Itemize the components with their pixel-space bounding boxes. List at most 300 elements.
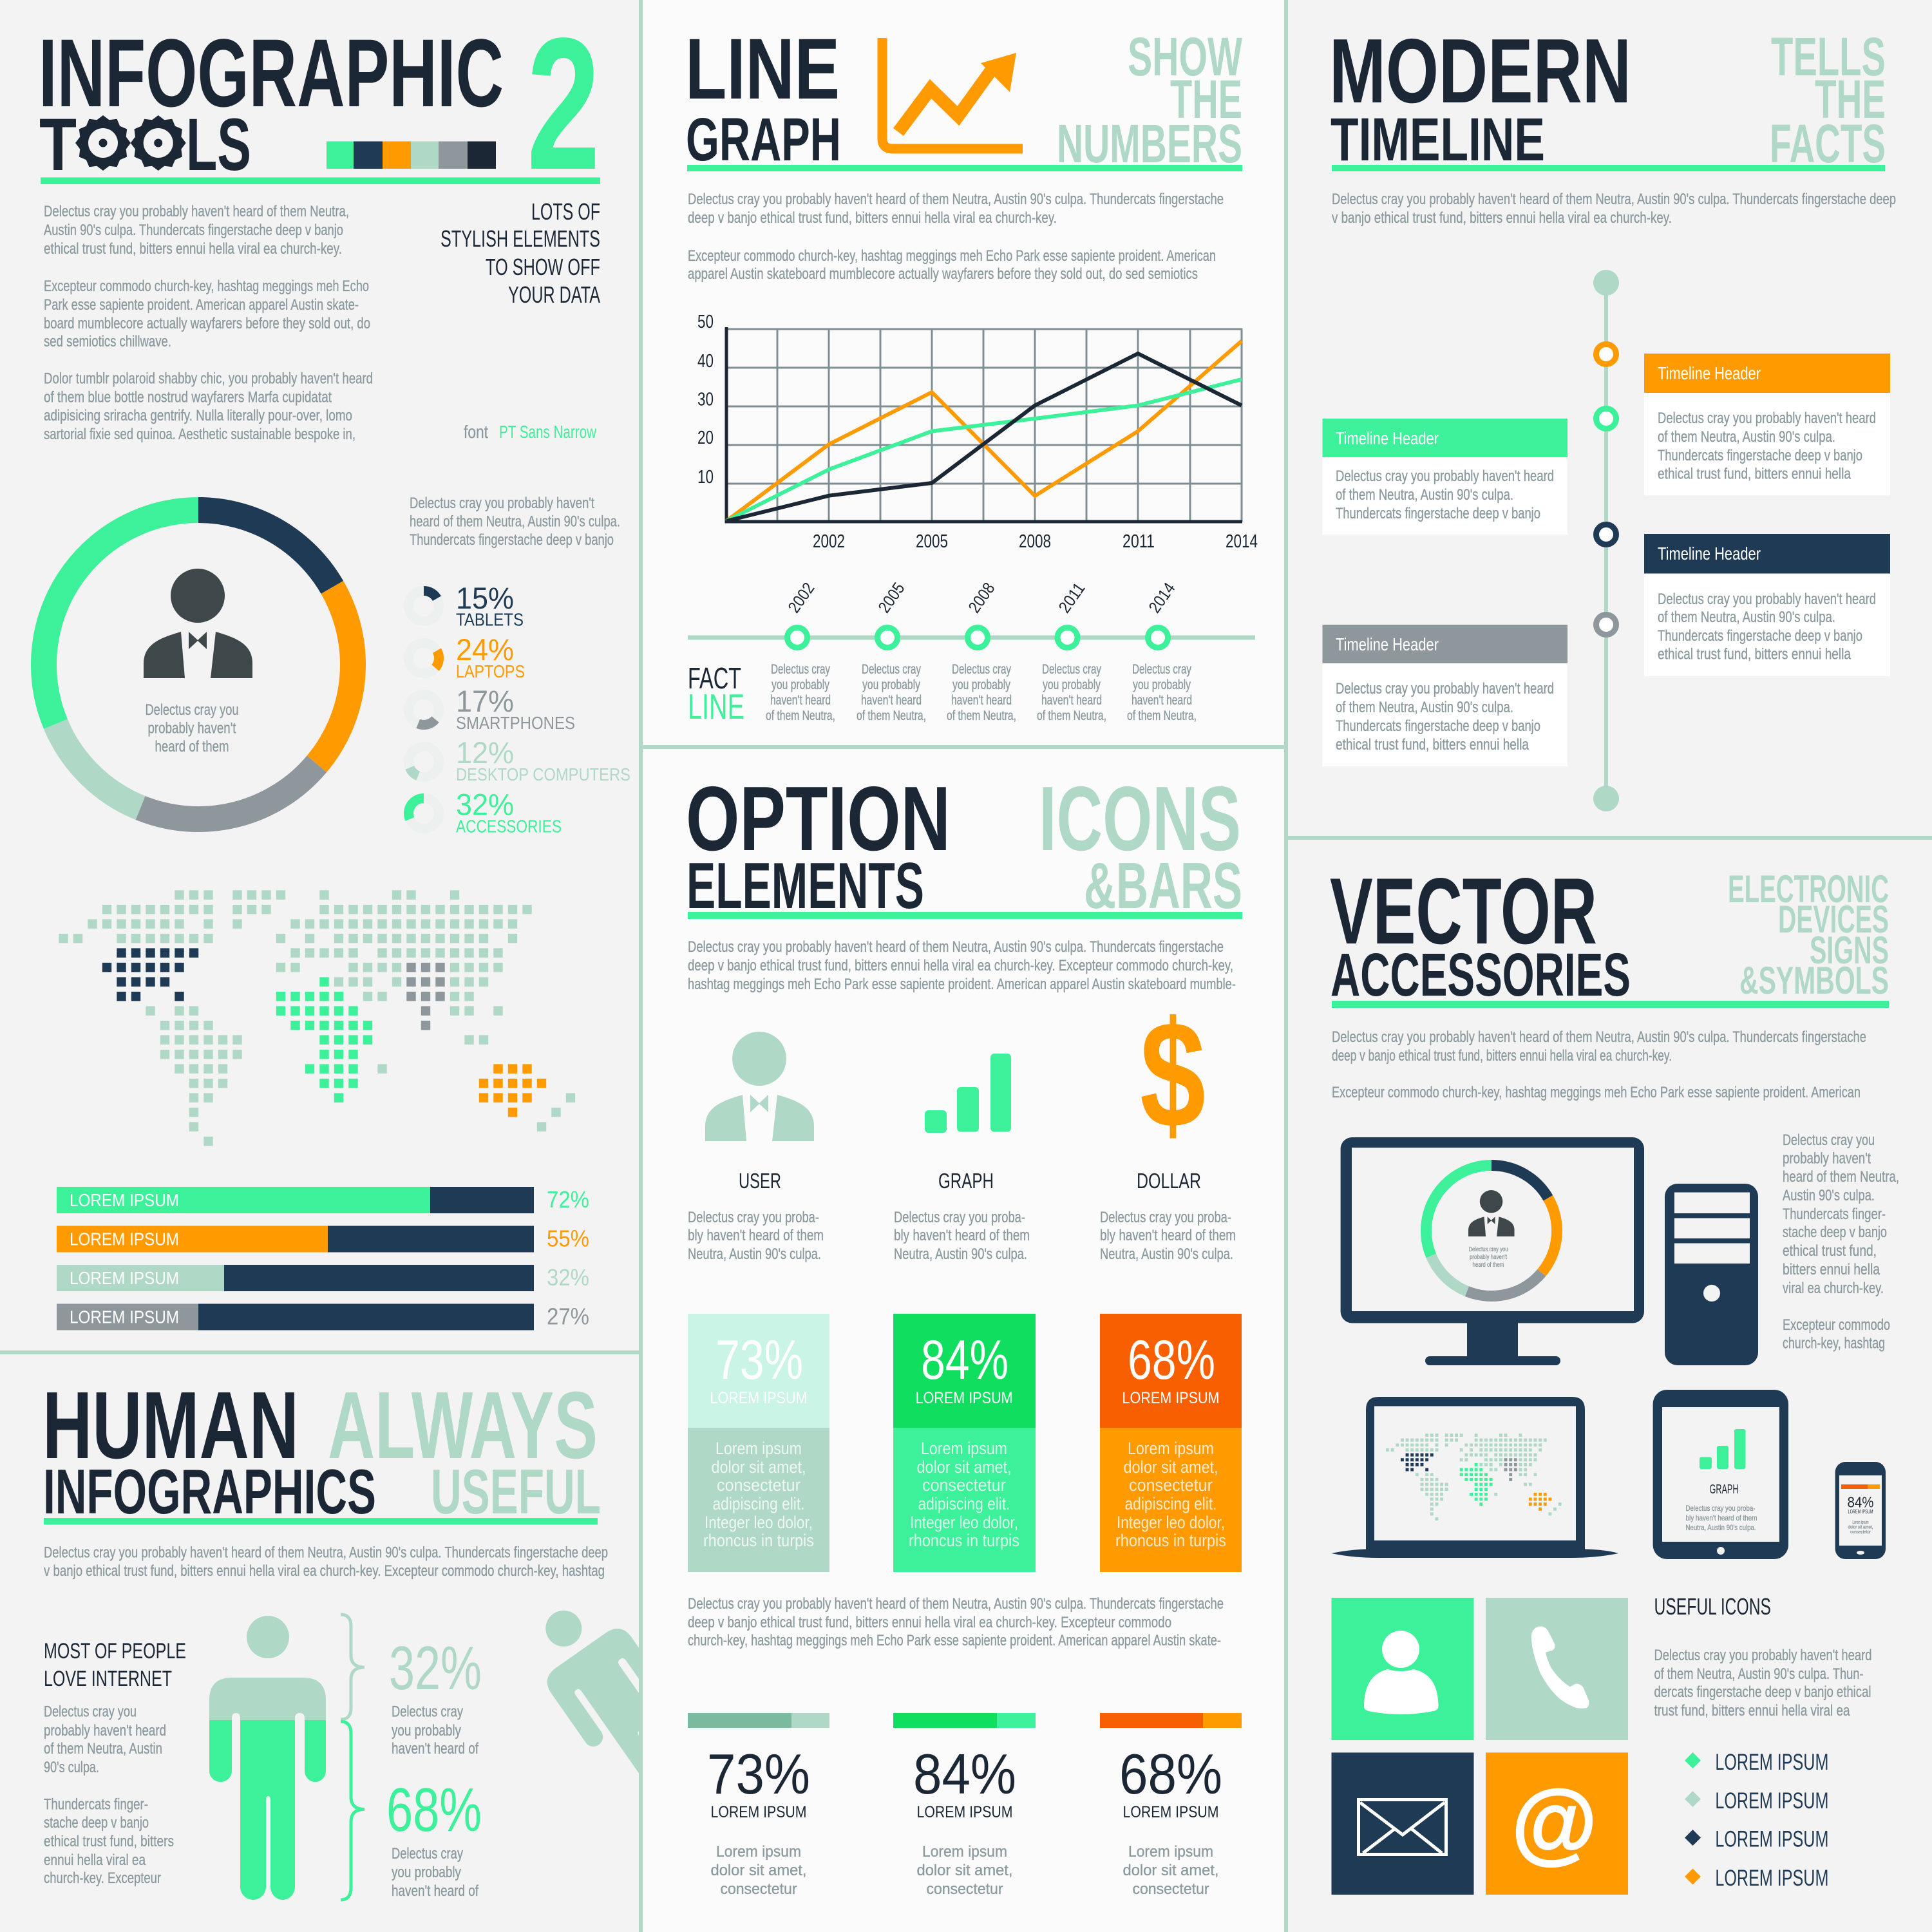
intro text: Delectus cray you probably haven't heard of them Neutra, — [44, 203, 349, 220]
title: infographic tools — [39, 19, 504, 186]
donut caption: probably haven't — [148, 720, 236, 737]
option card: 68%: LOREM IPSUM — [1122, 1389, 1220, 1407]
title: line graph: LINE — [685, 21, 840, 117]
useful icons text: trust fund, bitters ennui hella viral ea — [1654, 1702, 1850, 1719]
icon: computer tower — [1665, 1184, 1758, 1365]
slogan: show the numbers: THE — [1170, 69, 1242, 129]
intro text: Park esse sapiente proident. American apparel Austin skate- — [44, 296, 359, 314]
chart x axis labels: 2014 — [1226, 531, 1258, 552]
bar: 72%: 72% — [547, 1186, 589, 1213]
stat column: 68%: dolor sit amet, — [1123, 1862, 1218, 1879]
fact line captions: Delectus cray — [862, 662, 921, 677]
stat: 32%: Delectus cray — [392, 1703, 463, 1721]
slogan: show the numbers — [1057, 26, 1242, 174]
fact line captions: of them Neutra, — [947, 708, 1016, 723]
useful icons heading: USEFUL ICONS — [1654, 1593, 1771, 1620]
intro text: Austin 90's culpa. Thundercats fingerstache deep v banjo — [44, 222, 343, 239]
timeline card: orange — [1644, 354, 1890, 495]
stat: 68%: haven't heard of — [392, 1882, 478, 1900]
chart y axis labels: 40 — [697, 351, 714, 372]
timeline card: grey: of them Neutra, Austin 90's culpa. — [1336, 699, 1513, 716]
fact line captions: you probably — [862, 677, 920, 692]
bullet list: LOREM IPSUM — [1715, 1866, 1828, 1891]
devices side text — [1783, 1132, 1899, 1352]
icon: gear letters — [75, 115, 186, 171]
bar: 55% — [57, 1225, 589, 1252]
icon labels: GRAPH — [938, 1169, 994, 1193]
tablet screen text: GRAPH — [1709, 1482, 1739, 1497]
fact line captions: haven't heard — [951, 693, 1012, 708]
tilted human figure — [545, 1610, 639, 1774]
fact line captions: Delectus cray — [952, 662, 1011, 677]
colour palette swatches — [327, 142, 496, 169]
stat: 68%: Delectus cray — [392, 1845, 463, 1862]
legend: desktop computers: DESKTOP COMPUTERS — [456, 764, 630, 784]
fact line captions: haven't heard — [1041, 693, 1102, 708]
icon: smartphone: dolor sit amet, — [1848, 1526, 1873, 1530]
option card: 84%: dolor sit amet, — [917, 1457, 1011, 1477]
stat column: 73%: dolor sit amet, — [711, 1862, 806, 1879]
fact line captions: Delectus cray — [771, 662, 830, 677]
monitor screen donut — [1426, 1165, 1557, 1296]
devices side text: Delectus cray you — [1783, 1132, 1875, 1149]
legend: laptops: 24% — [456, 632, 514, 667]
title: option elements: &BARS — [1084, 850, 1242, 922]
fact line captions: of them Neutra, — [1127, 708, 1197, 723]
side heading: STYLISH ELEMENTS — [440, 225, 600, 252]
icon descriptions: Delectus cray you proba- — [894, 1209, 1025, 1226]
tablet screen text — [1686, 1482, 1757, 1532]
intro text: Delectus cray you probably haven't heard of them Neutra, Austin 90's culpa. Thundercats fingerstache deep — [44, 1544, 608, 1562]
icon: graph — [925, 1054, 1011, 1133]
fact line captions: you probably — [1133, 677, 1191, 692]
devices side text: bitters ennui hella — [1783, 1261, 1880, 1278]
timeline card: orange: of them Neutra, Austin 90's culpa. — [1658, 428, 1835, 446]
icon labels: USER — [739, 1169, 781, 1193]
lower body text: Delectus cray you probably haven't heard of them Neutra, Austin 90's culpa. Thundercats fingerstache — [688, 1595, 1224, 1613]
fact line markers — [787, 627, 1168, 648]
monitor screen caption: heard of them — [1472, 1262, 1504, 1269]
option card: 84%: consectetur — [922, 1475, 1006, 1495]
option card: 68%: consectetur — [1129, 1475, 1213, 1495]
tablet screen graph — [1700, 1429, 1745, 1469]
bar: 55%: 55% — [547, 1225, 589, 1252]
monitor screen caption: probably haven't — [1470, 1254, 1507, 1261]
timeline card: green: Delectus cray you probably haven't heard — [1336, 468, 1554, 485]
fact line years: 2014 — [1144, 579, 1179, 616]
chart y axis labels — [697, 312, 714, 488]
timeline card: navy — [1644, 534, 1890, 676]
heading rule — [688, 912, 1242, 919]
devices side text: heard of them Neutra, — [1783, 1168, 1899, 1186]
icon tile: at sign: @ — [1511, 1771, 1597, 1872]
option card: 73%: rhoncus in turpis — [703, 1531, 814, 1550]
stat: 32%: haven't heard of — [392, 1740, 478, 1757]
brace: 32% — [341, 1615, 365, 1719]
timeline card: navy: Thundercats fingerstache deep v banjo — [1658, 627, 1862, 645]
bar: 72% — [57, 1186, 589, 1213]
devices side text: ethical trust fund, — [1783, 1242, 1877, 1260]
legend: accessories — [408, 787, 562, 836]
option card: 73%: Integer leo dolor, — [705, 1513, 813, 1532]
legend: tablets: TABLETS — [456, 609, 524, 630]
useful icons text: dercats fingerstache deep v banjo ethical — [1654, 1683, 1871, 1701]
option card: 68%: Integer leo dolor, — [1117, 1513, 1225, 1532]
option card: 73%: adipiscing elit. — [712, 1494, 805, 1513]
left body text — [44, 1703, 174, 1887]
intro text — [44, 1544, 608, 1580]
bar: 72%: LOREM IPSUM — [70, 1190, 179, 1210]
option card: 84%: LOREM IPSUM — [916, 1389, 1012, 1407]
icon: user — [705, 1032, 814, 1141]
icon: smartphone — [1835, 1462, 1886, 1559]
fact line heading: FACT — [688, 661, 741, 695]
timeline card: grey: Delectus cray you probably haven't heard — [1336, 680, 1554, 697]
legend: accessories: ACCESSORIES — [456, 816, 562, 836]
stat column: 68%: consectetur — [1132, 1880, 1209, 1898]
fact line — [688, 579, 1255, 726]
fact line years: 2011 — [1054, 579, 1089, 616]
stat column: 68%: LOREM IPSUM — [1123, 1803, 1218, 1821]
legend: laptops — [408, 632, 525, 681]
title: modern timeline — [1329, 20, 1631, 174]
donut caption: heard of them — [155, 738, 229, 755]
title: line graph — [685, 21, 841, 174]
icon labels: DOLLAR — [1137, 1169, 1201, 1193]
bullet list: LOREM IPSUM — [1715, 1750, 1828, 1775]
title: modern timeline: MODERN — [1329, 20, 1631, 122]
monitor screen caption — [1468, 1246, 1508, 1269]
option card: 84%: Integer leo dolor, — [910, 1513, 1018, 1532]
monitor screen caption: Delectus cray you — [1468, 1246, 1508, 1253]
timeline card: green — [1323, 419, 1567, 535]
fact line heading: LINE — [688, 687, 744, 726]
option card: 73%: 73% — [715, 1329, 803, 1391]
stat column: 84%: dolor sit amet, — [917, 1862, 1012, 1879]
left body text: of them Neutra, Austin — [44, 1740, 162, 1757]
intro text: Delectus cray you probably haven't heard of them Neutra, Austin 90's culpa. Thundercats fingerstache — [688, 938, 1224, 956]
icon descriptions: bly haven't heard of them — [1100, 1227, 1236, 1244]
left body text: Delectus cray you — [44, 1703, 137, 1721]
timeline card: grey: Timeline Header — [1336, 634, 1439, 654]
slogan: tells the facts: THE — [1815, 69, 1886, 129]
tablet screen text: Neutra, Austin 90's culpa. — [1686, 1523, 1756, 1532]
timeline card: navy: Timeline Header — [1658, 544, 1761, 564]
title: vector accessories — [1330, 858, 1631, 1009]
timeline card: navy: of them Neutra, Austin 90's culpa. — [1658, 609, 1835, 626]
title: human infographics: HUMAN — [43, 1372, 299, 1479]
useful icons text: Delectus cray you probably haven't heard — [1654, 1647, 1871, 1664]
icon labels — [739, 1169, 1201, 1193]
intro text: Dolor tumblr polaroid shabby chic, you probably haven't heard — [44, 370, 373, 388]
title: infographic tools: INFOGRAPHIC — [39, 19, 504, 127]
subheading — [44, 1639, 186, 1691]
icon: laptop — [1332, 1397, 1618, 1558]
title: human infographics: USEFUL — [431, 1456, 601, 1527]
fact line captions: you probably — [772, 677, 829, 692]
tablet screen text: Delectus cray you proba- — [1686, 1504, 1756, 1513]
option card: 68%: 68% — [1128, 1329, 1215, 1391]
title: vector accessories: ACCESSORIES — [1331, 941, 1631, 1009]
intro text — [688, 938, 1236, 993]
slogan: tells the facts — [1770, 26, 1886, 174]
bar: 32% — [57, 1264, 589, 1291]
intro text: sed semiotics chillwave. — [44, 333, 171, 350]
bar: 27%: 27% — [547, 1303, 589, 1329]
intro text: deep v banjo ethical trust fund, bitters ennui hella viral ea church-key. Excepteur commodo church-key, — [688, 957, 1233, 974]
intro text: ethical trust fund, bitters ennui hella viral ea church-key. — [44, 240, 342, 258]
side heading: TO SHOW OFF — [486, 254, 600, 280]
devices side text: stache deep v banjo — [1783, 1224, 1887, 1241]
intro text: sartorial fixie sed quinoa. Aesthetic sustainable bespoke in, — [44, 426, 355, 443]
bar: 55%: LOREM IPSUM — [70, 1229, 179, 1249]
stat: 32%: you probably — [392, 1722, 461, 1739]
devices side text: church-key, hashtag — [1783, 1334, 1885, 1352]
devices side text: Thundercats finger- — [1783, 1206, 1886, 1223]
stat: 68% — [386, 1776, 482, 1900]
timeline card: green: Thundercats fingerstache deep v banjo — [1336, 505, 1540, 522]
intro text: adipisicing sriracha gentrify. Nulla literally pour-over, lomo — [44, 407, 352, 424]
icon: rising arrow chart — [882, 38, 1023, 149]
fact line captions: Delectus cray — [1042, 662, 1101, 677]
chart y axis labels: 20 — [697, 428, 714, 448]
bar: 32%: 32% — [547, 1264, 589, 1291]
stat column: 84% — [893, 1713, 1036, 1898]
devices side text: Excepteur commodo — [1783, 1316, 1890, 1334]
timeline card: grey — [1323, 625, 1567, 766]
icon descriptions — [688, 1209, 1236, 1263]
panel: line graph — [685, 21, 1258, 726]
donut legend — [408, 581, 630, 836]
dotted world map — [59, 895, 575, 1141]
bar: 27% — [57, 1303, 589, 1331]
intro text: deep v banjo ethical trust fund, bitters ennui hella viral ea church-key. — [1332, 1047, 1672, 1065]
heading rule — [44, 1518, 598, 1525]
icon: person with bow tie — [144, 569, 252, 678]
title: option elements: OPTION — [686, 768, 951, 870]
timeline card: grey: ethical trust fund, bitters ennui hella — [1336, 736, 1530, 753]
intro text: hashtag meggings meh Echo Park esse sapiente proident. American apparel Austin skateboard mumble- — [688, 976, 1236, 993]
side heading: YOUR DATA — [508, 281, 600, 308]
icon: smartphone: Lorem ipsum — [1852, 1520, 1869, 1525]
timeline card: grey: Thundercats fingerstache deep v banjo — [1336, 717, 1540, 735]
intro text: deep v banjo ethical trust fund, bitters ennui hella viral ea church-key. — [688, 209, 1057, 227]
panel: modern timeline — [1323, 20, 1896, 811]
intro text — [1332, 1028, 1866, 1101]
heading rule — [1332, 1001, 1889, 1008]
human figure 32/68 split — [209, 1616, 326, 1900]
stat column: 68% — [1100, 1713, 1242, 1898]
icon descriptions: Neutra, Austin 90's culpa. — [1100, 1245, 1233, 1263]
title: human infographics: ALWAYS — [328, 1372, 598, 1479]
fact line captions: of them Neutra, — [766, 708, 835, 723]
stat: 68%: you probably — [392, 1864, 461, 1881]
useful icons text — [1654, 1647, 1871, 1719]
stat column: 68%: Lorem ipsum — [1128, 1843, 1213, 1861]
donut caption: Delectus cray you — [146, 701, 238, 719]
laptop screen world map — [1386, 1435, 1562, 1519]
stat column: 73%: 73% — [707, 1742, 810, 1806]
fact line captions: you probably — [1043, 677, 1101, 692]
intro text: v banjo ethical trust fund, bitters ennui hella viral ea church-key. — [1332, 209, 1672, 227]
icon descriptions: bly haven't heard of them — [688, 1227, 824, 1244]
donut side text: Thundercats fingerstache deep v banjo — [410, 531, 614, 549]
devices side text: probably haven't — [1783, 1150, 1871, 1168]
subheading: LOVE INTERNET — [44, 1667, 172, 1691]
chart x axis labels — [813, 531, 1258, 552]
subheading: MOST OF PEOPLE — [44, 1639, 186, 1663]
heading rule — [41, 178, 600, 184]
fact line captions: haven't heard — [1132, 693, 1192, 708]
intro text — [44, 203, 373, 443]
legend: smartphones — [408, 684, 575, 733]
left body text: Thundercats finger- — [44, 1795, 148, 1814]
fact line captions — [766, 662, 1197, 723]
title: option elements: ELEMENTS — [687, 850, 924, 922]
devices side text: Austin 90's culpa. — [1783, 1187, 1875, 1204]
timeline card: navy: ethical trust fund, bitters ennui hella — [1658, 646, 1852, 663]
bullet list: LOREM IPSUM — [1715, 1788, 1828, 1814]
intro text: Excepteur commodo church-key, hashtag meggings meh Echo Park esse sapiente proident. American — [688, 247, 1216, 265]
left body text: probably haven't heard — [44, 1722, 166, 1739]
chart y axis labels: 10 — [697, 467, 714, 488]
panel: option elements — [686, 768, 1242, 1898]
heading rule — [1332, 165, 1885, 171]
bullet list — [1685, 1750, 1828, 1891]
timeline card: orange: Thundercats fingerstache deep v banjo — [1658, 447, 1862, 464]
left body text: church-key. Excepteur — [44, 1870, 161, 1887]
title: human infographics: INFOGRAPHICS — [43, 1456, 376, 1527]
option card: 73%: LOREM IPSUM — [710, 1389, 808, 1407]
stat column: 73%: consectetur — [720, 1880, 797, 1898]
legend: accessories: 32% — [456, 787, 514, 822]
panel: vector accessories — [1330, 858, 1899, 1895]
icon descriptions: Delectus cray you proba- — [688, 1209, 819, 1226]
bar: 27%: LOREM IPSUM — [70, 1307, 179, 1327]
useful icons text: of them Neutra, Austin 90's culpa. Thun- — [1654, 1665, 1864, 1683]
bar: 32%: LOREM IPSUM — [70, 1268, 179, 1288]
fact line heading — [688, 661, 744, 726]
icon descriptions: Delectus cray you proba- — [1100, 1209, 1231, 1226]
option card: 84%: Lorem ipsum — [921, 1439, 1007, 1458]
legend: smartphones: 17% — [456, 684, 514, 718]
title: option elements: ICONS — [1039, 768, 1241, 870]
icon descriptions: bly haven't heard of them — [894, 1227, 1030, 1244]
chart y axis labels: 50 — [697, 312, 714, 332]
slogan: electronic devices — [1728, 867, 1889, 1002]
option card: 84% — [893, 1314, 1036, 1572]
intro text: board mumblecore actually wayfarers before they sold out, do — [44, 315, 370, 332]
title: line graph: GRAPH — [686, 106, 841, 174]
stat: 32% — [389, 1634, 482, 1757]
stat column: 84%: LOREM IPSUM — [917, 1803, 1012, 1821]
vertical timeline — [1593, 270, 1619, 811]
timeline card: orange: ethical trust fund, bitters ennui hella — [1658, 465, 1852, 483]
option card: 68%: Lorem ipsum — [1128, 1439, 1214, 1458]
brace: 68% — [341, 1721, 365, 1900]
option card: 84%: 84% — [921, 1329, 1009, 1391]
lower body text — [688, 1595, 1224, 1649]
icon: smartphone: 84% — [1847, 1494, 1874, 1511]
stat column: 84%: 84% — [913, 1742, 1016, 1806]
icon: dollar: $ — [1140, 990, 1206, 1160]
title: infographic tools: T — [39, 104, 77, 186]
intro text: apparel Austin skateboard mumblecore actually wayfarers before they sold out, do sed semiotics — [688, 265, 1198, 283]
intro text: v banjo ethical trust fund, bitters ennui hella viral ea church-key. Excepteur commodo church-key, hashtag — [44, 1562, 605, 1580]
chart x axis labels: 2002 — [813, 531, 845, 552]
line chart — [697, 312, 1258, 552]
legend: tablets: 15% — [456, 581, 514, 615]
fact line captions: of them Neutra, — [1037, 708, 1106, 723]
chart y axis labels: 30 — [697, 389, 714, 410]
option card: 84%: rhoncus in turpis — [909, 1531, 1019, 1550]
bullet list: LOREM IPSUM — [1715, 1826, 1828, 1852]
chart x axis labels: 2005 — [916, 531, 948, 552]
fact line years: 2005 — [874, 579, 909, 616]
icon tile: user — [1332, 1598, 1473, 1740]
fact line years — [784, 579, 1179, 616]
side heading — [440, 198, 600, 308]
option card: 73% — [688, 1314, 829, 1572]
legend: desktop computers: 12% — [456, 735, 514, 770]
panel: infographic tools — [39, 0, 630, 1331]
option card: 68% — [1100, 1314, 1242, 1572]
option card: 84%: adipiscing elit. — [918, 1494, 1010, 1513]
devices side text: viral ea church-key. — [1783, 1280, 1884, 1297]
font credit — [464, 422, 597, 442]
left body text: ethical trust fund, bitters — [44, 1833, 174, 1850]
timeline card: green: of them Neutra, Austin 90's culpa. — [1336, 486, 1513, 504]
intro text — [1332, 191, 1896, 227]
legend: laptops: LAPTOPS — [456, 661, 525, 681]
intro text: of them blue bottle nostrud wayfarers Marfa cupidatat — [44, 389, 332, 406]
tablet screen text: bly haven't heard of them — [1686, 1513, 1757, 1522]
fact line captions: haven't heard — [770, 693, 831, 708]
timeline card: green: Timeline Header — [1336, 428, 1439, 448]
slogan: show the numbers: NUMBERS — [1057, 113, 1242, 174]
icon tile: at sign — [1486, 1752, 1628, 1895]
donut side text: Delectus cray you probably haven't — [410, 495, 594, 512]
chart x axis labels: 2011 — [1122, 531, 1155, 552]
middle column background — [643, 0, 1284, 1932]
icon: smartphone: consectetur — [1850, 1530, 1871, 1535]
fact line captions: haven't heard — [861, 693, 922, 708]
lower body text: deep v banjo ethical trust fund, bitters ennui hella viral ea church-key. Excepteur commodo — [688, 1614, 1171, 1631]
stat column: 68%: 68% — [1119, 1742, 1222, 1806]
legend: desktop computers — [408, 735, 630, 784]
intro text — [688, 191, 1224, 283]
icon tile: envelope — [1332, 1752, 1473, 1895]
icon descriptions: Neutra, Austin 90's culpa. — [894, 1245, 1027, 1263]
panel: human infographics — [44, 1391, 639, 1901]
option card: 73%: Lorem ipsum — [715, 1439, 802, 1458]
stat column: 84%: consectetur — [926, 1880, 1003, 1898]
option card: 68%: dolor sit amet, — [1123, 1457, 1218, 1477]
option card: 68%: adipiscing elit. — [1124, 1494, 1217, 1513]
side heading: LOTS OF — [531, 198, 600, 225]
icon tile: phone — [1486, 1598, 1628, 1740]
slogan: show the numbers: SHOW — [1128, 26, 1242, 87]
donut chart — [44, 510, 353, 819]
option card: 73%: consectetur — [717, 1475, 800, 1495]
option card: 68%: rhoncus in turpis — [1115, 1531, 1226, 1550]
lower body text: church-key, hashtag meggings meh Echo Park esse sapiente proident. American apparel Austin skate- — [688, 1632, 1221, 1649]
option card: 73%: dolor sit amet, — [711, 1457, 806, 1477]
stat column: 73% — [688, 1713, 829, 1898]
stat column: 73%: LOREM IPSUM — [711, 1803, 806, 1821]
chart x axis labels: 2008 — [1019, 531, 1051, 552]
legend: tablets — [408, 581, 524, 630]
